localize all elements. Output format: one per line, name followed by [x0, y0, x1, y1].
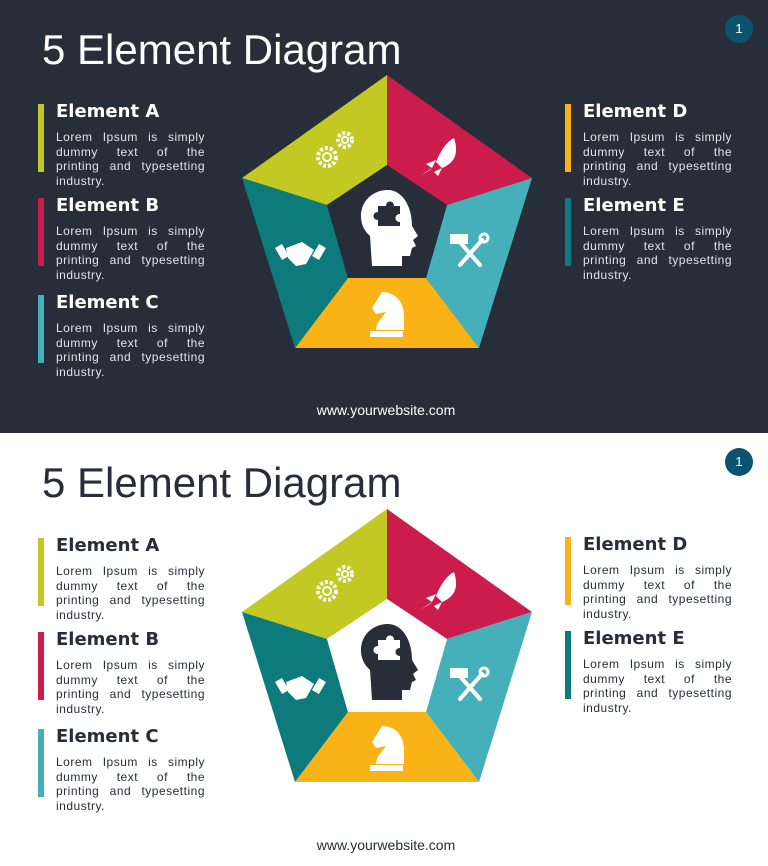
element C text: Element C	[56, 292, 159, 313]
icon: head with puzzle	[361, 190, 418, 266]
element E text: Element E	[583, 195, 685, 216]
segment: light teal tools	[426, 178, 532, 348]
segment: green gears	[242, 509, 387, 639]
element B text	[38, 195, 205, 282]
element B text: Lorem Ipsum is simply dummy text of the printing and typesetting industry.	[56, 658, 205, 716]
element A text: Lorem Ipsum is simply dummy text of the printing and typesetting industry.	[56, 130, 205, 188]
icon: tools	[452, 234, 488, 265]
element E text: Lorem Ipsum is simply dummy text of the printing and typesetting industry.	[583, 224, 732, 282]
center	[327, 599, 447, 712]
element D text: Element D	[583, 101, 687, 122]
icon: handshake	[275, 242, 326, 266]
footer url: www.yourwebsite.com	[317, 402, 455, 418]
segment: red rocket	[387, 509, 532, 639]
element E text: Element E	[583, 628, 685, 649]
badge: page number: 1	[735, 21, 743, 36]
icon: rocket	[420, 572, 456, 610]
icon: gears	[318, 133, 352, 166]
footer url: www.yourwebsite.com	[317, 837, 455, 853]
center	[327, 165, 447, 278]
element C text: Lorem Ipsum is simply dummy text of the printing and typesetting industry.	[56, 755, 205, 812]
element A text: Lorem Ipsum is simply dummy text of the printing and typesetting industry.	[56, 564, 205, 622]
title: 5 Element Diagram	[42, 459, 401, 506]
badge: page number	[725, 448, 753, 476]
segment: yellow chess	[295, 278, 479, 348]
element E text	[565, 195, 732, 282]
segment: green gears	[242, 75, 387, 205]
element D text	[565, 101, 732, 188]
element C text: Element C	[56, 726, 159, 747]
element B text: Element B	[56, 629, 159, 650]
icon: handshake	[275, 676, 326, 700]
element C text	[38, 292, 205, 378]
icon: chess knight	[370, 726, 404, 771]
icon: tools	[452, 668, 488, 699]
segment: light teal tools	[426, 612, 532, 782]
element B text: Element B	[56, 195, 159, 216]
element B text: Lorem Ipsum is simply dummy text of the printing and typesetting industry.	[56, 224, 205, 282]
badge: page number: 1	[735, 454, 743, 469]
pentagon diagram	[242, 75, 532, 348]
element D text: Lorem Ipsum is simply dummy text of the printing and typesetting industry.	[583, 130, 732, 188]
slide: dark version	[0, 0, 768, 433]
element C text	[38, 726, 205, 812]
element E text	[565, 628, 732, 714]
element A text: Element A	[56, 535, 159, 556]
segment: yellow chess	[295, 712, 479, 782]
element A text: Element A	[56, 101, 159, 122]
segment: dark teal handshake	[242, 612, 348, 782]
title: 5 Element Diagram	[42, 26, 401, 73]
icon: head with puzzle	[361, 624, 418, 700]
element C text: Lorem Ipsum is simply dummy text of the printing and typesetting industry.	[56, 321, 205, 378]
element B text	[38, 629, 205, 716]
element A text	[38, 101, 205, 188]
element D text: Lorem Ipsum is simply dummy text of the printing and typesetting industry.	[583, 563, 732, 620]
pentagon diagram	[242, 509, 532, 782]
slide: light version	[0, 433, 768, 866]
segment: dark teal handshake	[242, 178, 348, 348]
icon: chess knight	[370, 292, 404, 337]
element D text: Element D	[583, 534, 687, 555]
element E text: Lorem Ipsum is simply dummy text of the printing and typesetting industry.	[583, 657, 732, 714]
segment: red rocket	[387, 75, 532, 205]
icon: gears	[318, 567, 352, 600]
icon: rocket	[420, 138, 456, 176]
badge: page number	[725, 15, 753, 43]
element D text	[565, 534, 732, 620]
element A text	[38, 535, 205, 622]
